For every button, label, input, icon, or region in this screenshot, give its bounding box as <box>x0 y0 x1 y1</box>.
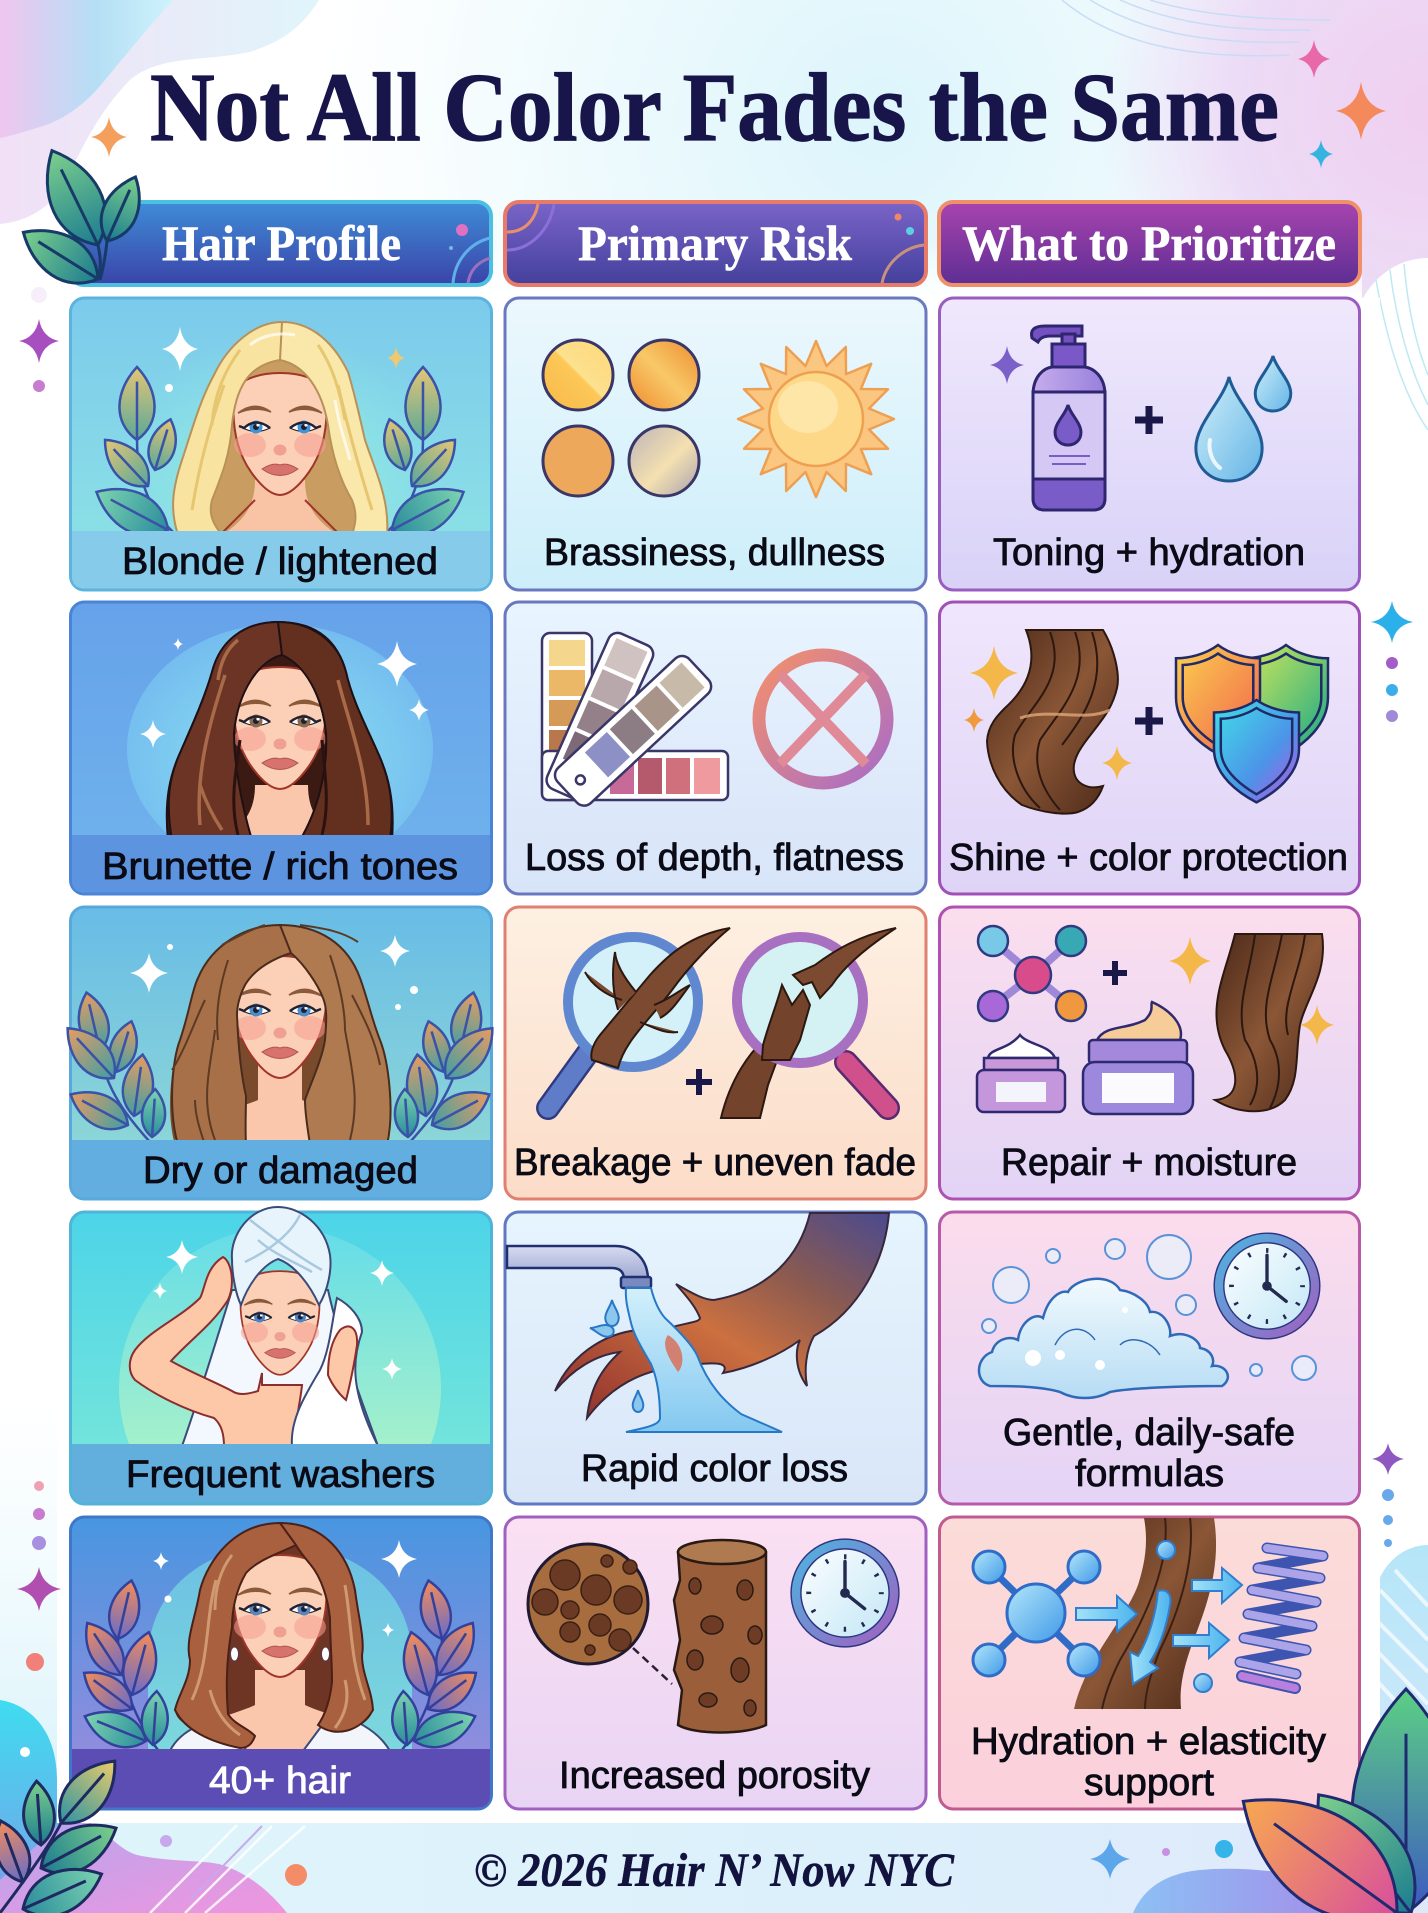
white table backdrop <box>57 240 1380 1823</box>
icon: molecule <box>978 926 1086 1021</box>
icon: sparkle <box>1300 1005 1334 1045</box>
decoration: bottom-left leaves <box>0 1748 130 1913</box>
icon: sparkles <box>130 935 418 1010</box>
icon: faded colour fan <box>542 630 728 810</box>
icon: sparkles <box>153 1540 417 1637</box>
panel: Blonde / lightened <box>70 298 492 590</box>
decoration: top-left leaves <box>12 140 151 297</box>
icon: sparkles <box>964 646 1132 780</box>
icon: hair strand <box>1074 1518 1216 1709</box>
panel: Shine + color protection <box>940 602 1360 894</box>
header: Hair Profile: Hair Profile <box>162 215 401 271</box>
icon: plus <box>1135 406 1163 434</box>
panel: Blonde / lightened: Blonde / lightened <box>122 541 438 583</box>
panel: Frequent washers: Frequent washers <box>126 1454 435 1496</box>
label band <box>72 1749 490 1808</box>
icon: large cream jar <box>1083 1002 1193 1114</box>
header: Hair Profile <box>70 202 491 285</box>
panel: Repair + moisture <box>940 907 1360 1199</box>
panel: Brunette / rich tones <box>70 602 492 894</box>
icon: colour swatches <box>543 340 699 496</box>
panel: Toning + hydration <box>940 298 1360 590</box>
panel: 40+ hair: 40+ hair <box>209 1760 351 1802</box>
header: What to Prioritize <box>939 202 1360 285</box>
panel: Frequent washers <box>70 1207 492 1504</box>
panel: Toning + hydration: Toning + hydration <box>993 532 1305 574</box>
icon: small cream jar <box>977 1035 1065 1112</box>
panel: Repair + moisture: Repair + moisture <box>1001 1142 1297 1184</box>
icon: leaf sprigs <box>75 1577 485 1756</box>
icon: leaf sprigs <box>87 367 473 547</box>
icon: leaf sprigs <box>56 989 504 1142</box>
header: What to Prioritize: What to Prioritize <box>962 215 1336 271</box>
icon: water stream <box>589 1288 782 1432</box>
icon: bubbles <box>982 1235 1316 1380</box>
icon: sun <box>738 341 894 497</box>
panel: Rapid color loss: Rapid color loss <box>581 1448 848 1490</box>
decoration: bottom-right leaves <box>1216 1689 1428 1913</box>
header: Primary Risk: Primary Risk <box>578 215 852 271</box>
icon: plus <box>1135 707 1163 735</box>
portrait: blonde woman <box>173 322 387 535</box>
icon: porous hair cross-section <box>528 1544 648 1664</box>
icon: spring <box>1240 1548 1323 1688</box>
portrait: brunette woman <box>167 622 393 840</box>
icon: hair under water <box>555 1213 889 1418</box>
panel: Dry or damaged: Dry or damaged <box>143 1150 418 1192</box>
icon: magnifier over split hair <box>548 928 730 1108</box>
panel: Gentle, daily-safe formulas: formulas <box>1075 1453 1224 1495</box>
icon: molecule <box>973 1551 1100 1676</box>
icon: faucet <box>507 1246 651 1288</box>
icon: glossy hair lock <box>987 630 1118 814</box>
icon: shields <box>1176 645 1328 802</box>
panel: 40+ hair <box>70 1517 492 1809</box>
panel: Shine + color protection: Shine + color protection <box>949 837 1348 879</box>
label band <box>72 1140 490 1198</box>
panel: Increased porosity: Increased porosity <box>559 1755 870 1797</box>
label band <box>72 1444 490 1502</box>
label band <box>72 531 490 588</box>
icon: clock <box>791 1539 899 1647</box>
label band <box>72 835 490 892</box>
footer copyright: © 2026 Hair N’ Now NYC <box>474 1844 955 1897</box>
icon: plus <box>686 1069 712 1095</box>
icon: plus <box>1103 961 1127 985</box>
panel: Brassiness, dullness <box>505 298 926 590</box>
icon: hydration arrows <box>1076 1568 1242 1684</box>
icon: hair lock <box>1215 934 1323 1111</box>
panel: Gentle, daily-safe formulas <box>940 1212 1360 1504</box>
panel: Breakage + uneven fade: Breakage + uneven fade <box>514 1142 916 1184</box>
dashed connector <box>633 1648 672 1684</box>
panel: Loss of depth, flatness <box>505 602 926 894</box>
icon: clock <box>1214 1233 1320 1339</box>
portrait: woman with wavy auburn hair <box>168 1523 392 1755</box>
icon: magnifier over broken hair <box>721 928 896 1118</box>
portrait: woman with dry hair <box>170 925 391 1145</box>
panel: Dry or damaged <box>56 907 504 1199</box>
panel: Gentle, daily-safe formulas: Gentle, daily-safe <box>1003 1412 1295 1454</box>
panel: Hydration + elasticity support <box>940 1517 1360 1809</box>
panel: Hydration + elasticity support: support <box>1084 1762 1214 1804</box>
icon: foam cloud <box>979 1279 1228 1398</box>
portrait: woman in towel <box>130 1207 378 1447</box>
icon: porous hair shaft <box>674 1540 766 1732</box>
icon: crossed circle <box>759 655 887 783</box>
header: Primary Risk <box>505 202 926 285</box>
icon: sparkles <box>162 327 405 392</box>
panel: Brassiness, dullness: Brassiness, dullness <box>544 532 885 574</box>
panel: Breakage + uneven fade <box>505 907 926 1199</box>
panel: Brunette / rich tones: Brunette / rich tones <box>102 846 458 888</box>
icon: sparkles <box>140 638 429 748</box>
title: Not All Color Fades the Same <box>150 54 1279 162</box>
icon: sparkles <box>153 1240 402 1380</box>
icon: water drops <box>1196 356 1291 481</box>
icon: sparkle <box>1169 937 1211 985</box>
panel: Increased porosity <box>505 1517 926 1809</box>
panel: Loss of depth, flatness: Loss of depth, flatness <box>525 837 904 879</box>
panel: Hydration + elasticity support: Hydration + elasticity <box>971 1721 1326 1763</box>
panel: Rapid color loss <box>505 1212 926 1504</box>
icon: toning bottle <box>990 326 1105 510</box>
